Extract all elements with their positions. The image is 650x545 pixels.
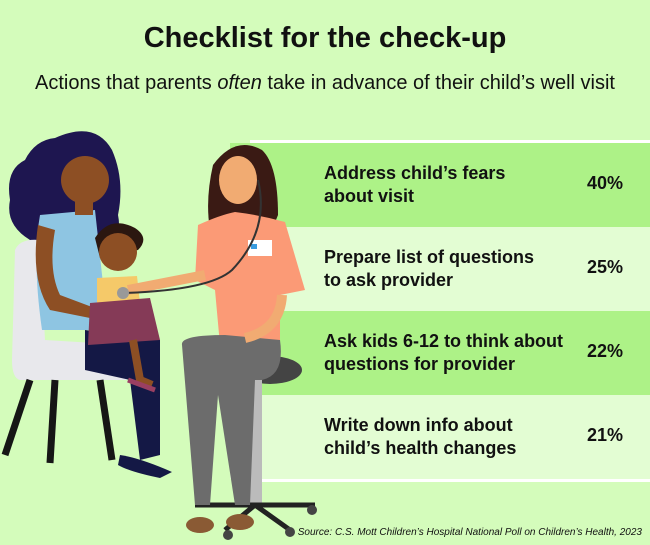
nurse stool (238, 356, 302, 384)
row 3: questions for provider (324, 354, 515, 374)
nurse body (195, 212, 305, 345)
nurse arm (128, 275, 205, 290)
row 3 (230, 311, 650, 395)
nurse legs (182, 335, 281, 505)
mother body (36, 210, 108, 330)
row 3: 22% (587, 341, 623, 361)
source: Source: C.S. Mott Children’s Hospital National Poll on Children’s Health, 2023 (298, 527, 642, 538)
stethoscope (125, 180, 261, 293)
row 2: 25% (587, 257, 623, 277)
row 1: 40% (587, 173, 623, 193)
row 3: Ask kids 6-12 to think about (324, 331, 563, 351)
illustration: parent, child, nurse (2, 131, 317, 540)
row 2: Prepare list of questions (324, 247, 534, 267)
row 4: Write down info about (324, 415, 513, 435)
row 4: child’s health changes (324, 438, 516, 458)
mother hair (9, 131, 120, 240)
chair (12, 240, 127, 380)
row 4 (230, 395, 650, 479)
row 1 (230, 143, 650, 227)
child (95, 223, 143, 258)
row 4: 21% (587, 425, 623, 445)
subtitle: Actions that parents often take in advance of their child’s well visit (35, 72, 615, 94)
nurse hair (208, 145, 278, 230)
row 1: Address child’s fears (324, 163, 505, 183)
title: Checklist for the check-up (144, 22, 506, 54)
divider lines (250, 140, 650, 143)
row 2 (230, 227, 650, 311)
row 2: to ask provider (324, 270, 453, 290)
row 1: about visit (324, 186, 414, 206)
